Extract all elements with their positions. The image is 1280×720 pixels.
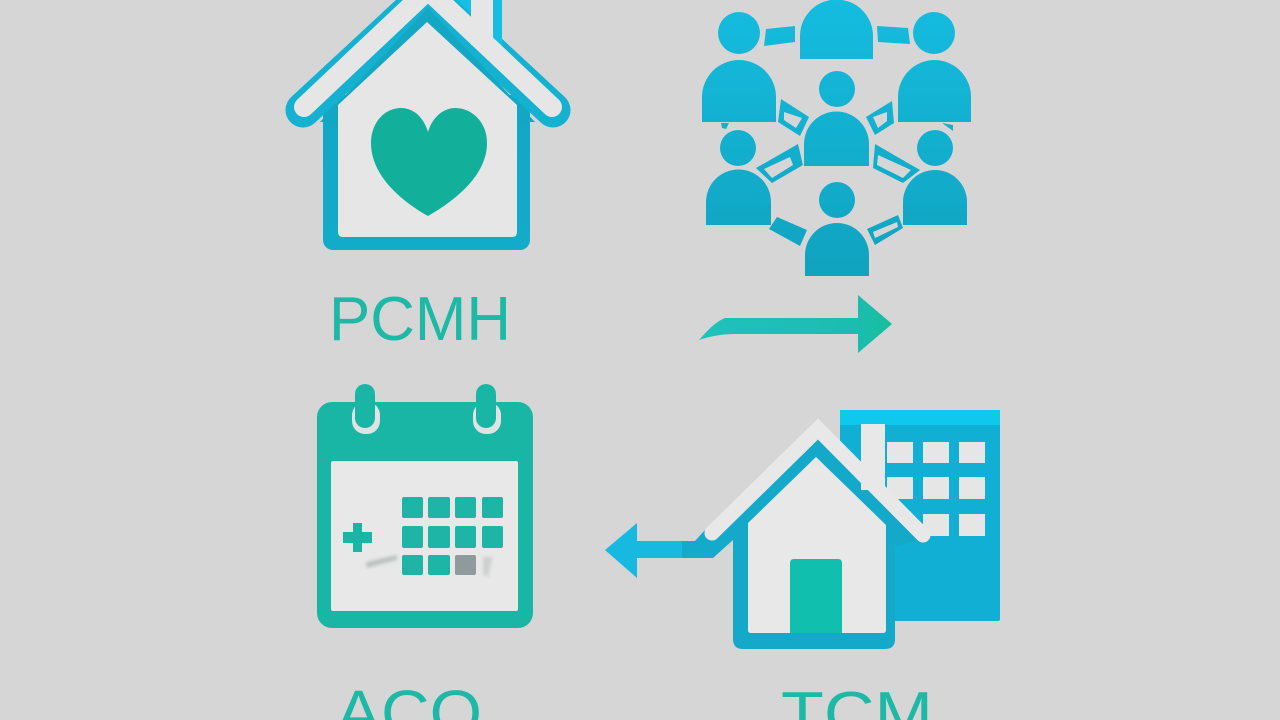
arrow: left xyxy=(605,523,733,578)
connectors xyxy=(764,26,795,46)
icon: door xyxy=(790,559,842,633)
icon: house and building (TCM) xyxy=(712,410,1000,649)
icon: care team network xyxy=(702,0,971,276)
arrow: right xyxy=(699,295,892,353)
icon: heart xyxy=(371,108,487,216)
icon: calendar (ACO) xyxy=(317,384,533,628)
icon: house with heart (PCMH) xyxy=(303,0,553,250)
smudges xyxy=(366,555,493,577)
icon: plus xyxy=(343,523,372,552)
heading: PCMH: PCMH xyxy=(329,285,511,354)
calendar grid xyxy=(402,497,503,575)
